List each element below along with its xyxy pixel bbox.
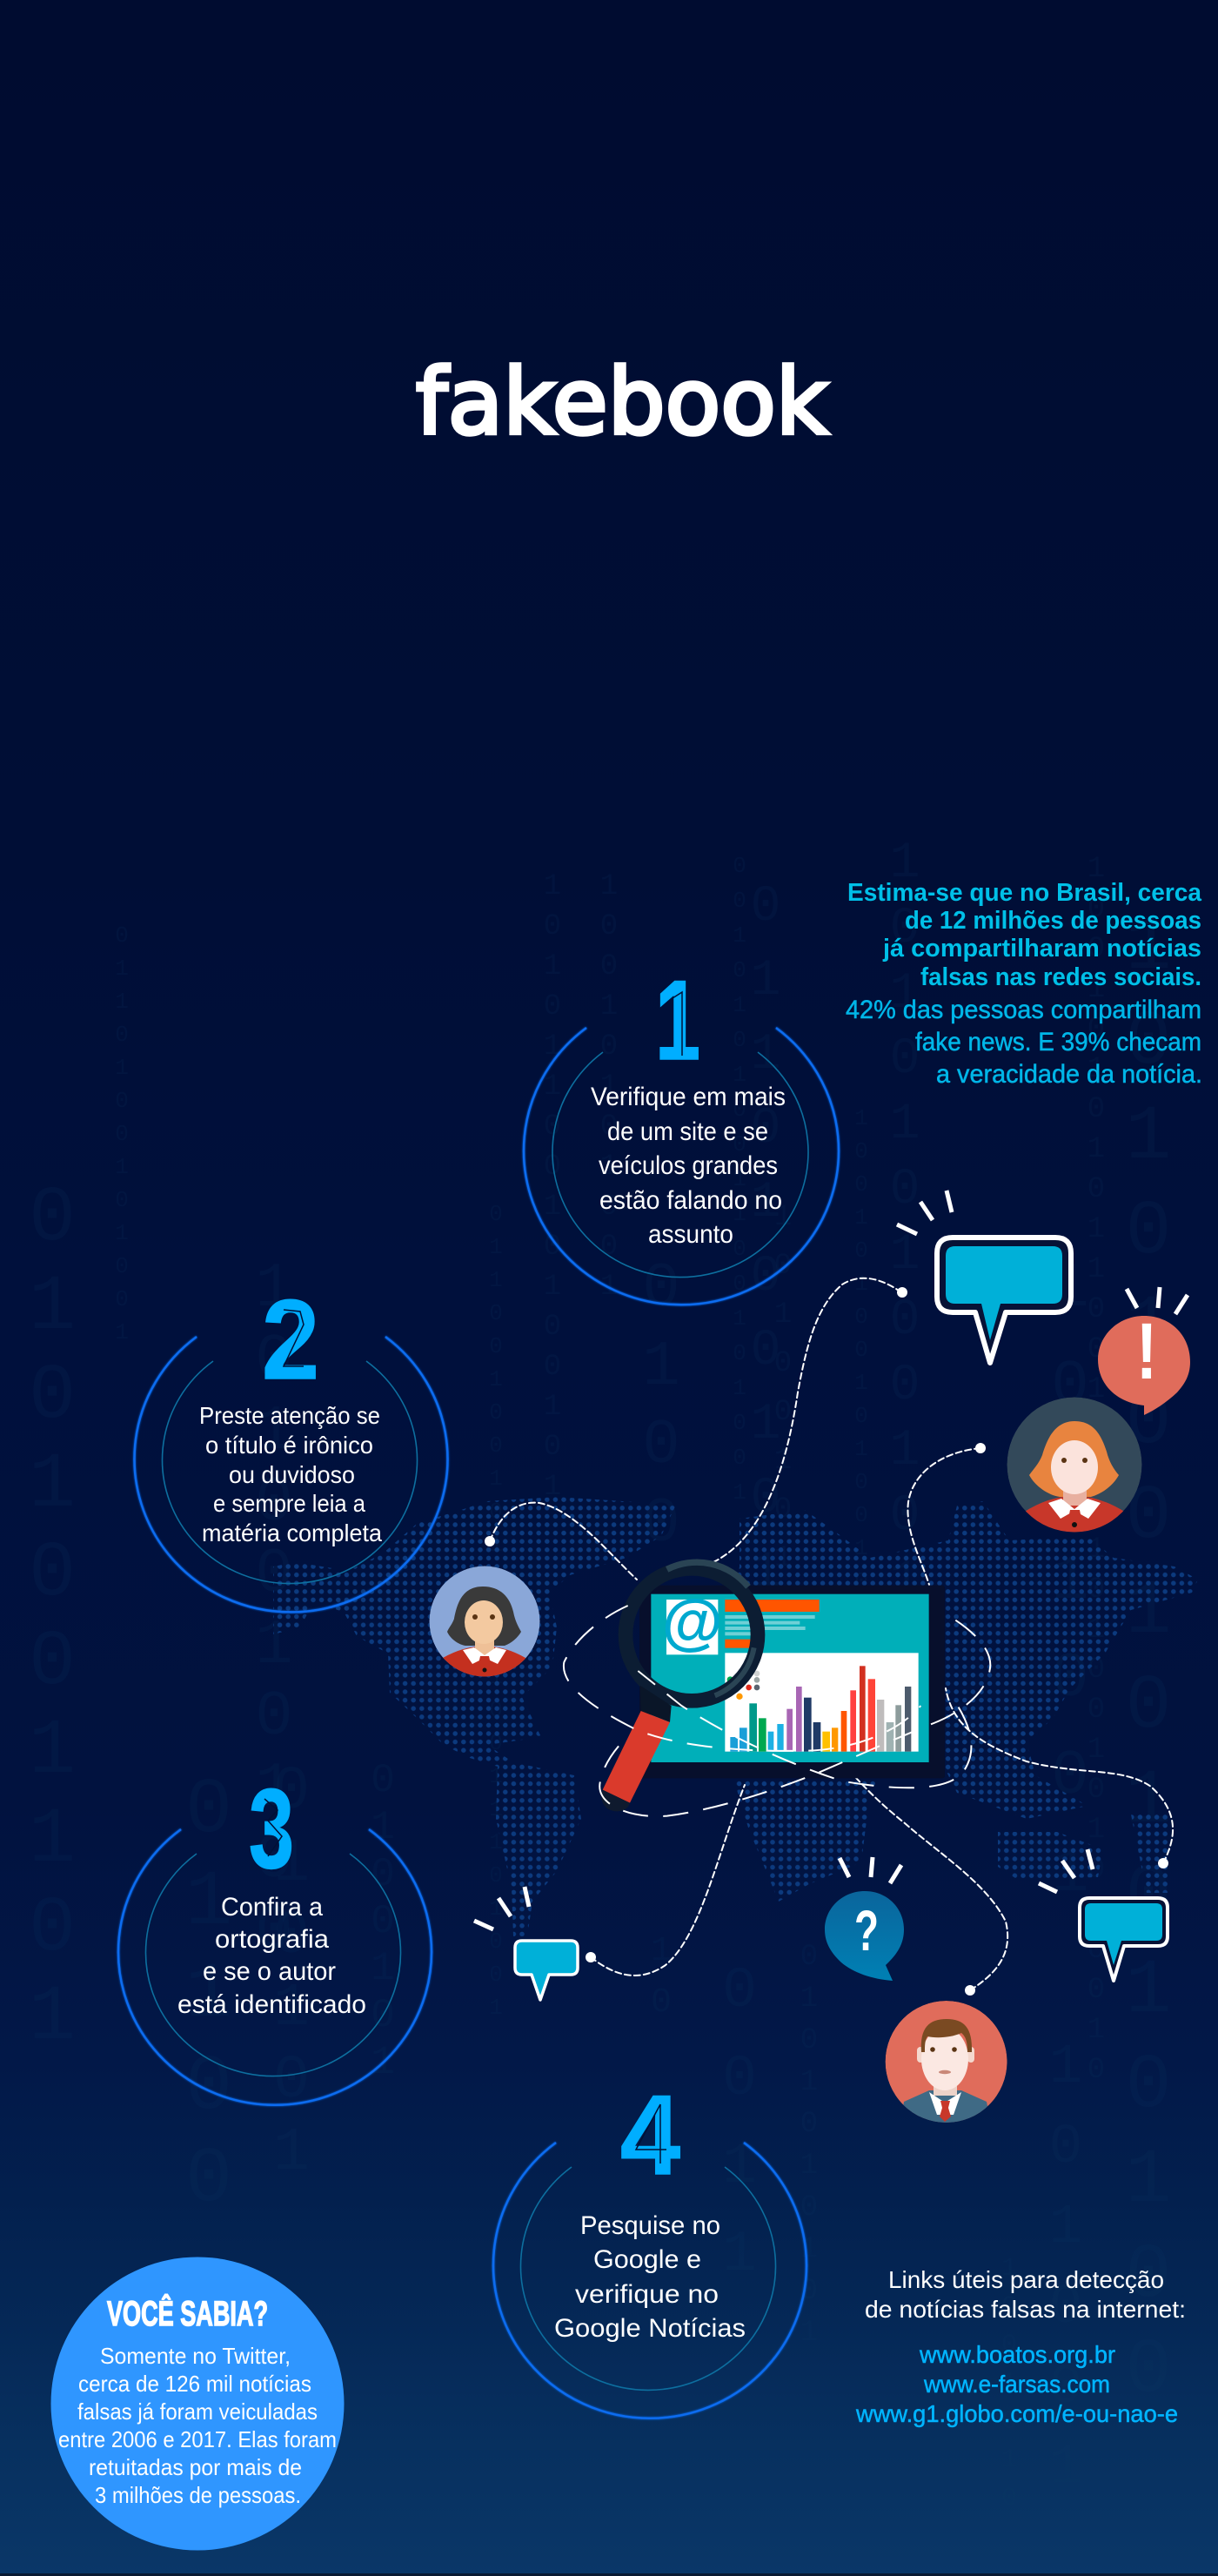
speech bubble: large [897,1191,1071,1363]
binary digit columns: 0100101 [360,1758,405,2087]
binary digit columns: 10 [642,1932,680,2035]
binary digit columns: 0010101001100101001 [726,853,753,1514]
tablet body [639,1586,945,1778]
links heading: Links úteis para detecção [888,2266,1164,2293]
question ticks [840,1857,901,1883]
step 1 text: assunto [648,1220,733,1249]
did you know text: 3 milhões de pessoas. [95,2482,301,2508]
binary digit columns: 010101 [258,1758,325,2191]
dotted world map [273,1497,1198,1936]
step 3 [118,1765,432,2105]
step 1 [524,956,839,1305]
binary digit columns: 1010110010100101 [536,870,569,1511]
bubble attention ticks [897,1191,952,1234]
did you know heading: VOCÊ SABIA? [107,2293,268,2333]
step 2 number: 2 [262,1276,319,1403]
did you know text: Somente no Twitter, [100,2343,291,2369]
step 3 text: Confira a [221,1893,323,1922]
step 4 [493,2071,806,2418]
did you know text: falsas já foram veiculadas [77,2398,318,2425]
step 1 number: 1 [655,956,700,1083]
alert bubble [1098,1287,1190,1415]
statistics text [846,879,1202,1089]
did you know text: cerca de 126 mil notícias [78,2371,311,2397]
binary digit columns: 1001010101100101010100101010010 [1080,853,1113,2094]
links list: www.g1.globo.com/e-ou-nao-e [855,2400,1178,2427]
links list [855,2341,1178,2427]
step 2 text: ou duvidoso [229,1461,355,1488]
step 3 number: 3 [249,1765,294,1892]
binary digit columns: 1010010100 [238,1253,310,1967]
step 2 text: e sempre leia a [213,1490,365,1517]
did you know text: retuitadas por mais de [89,2454,302,2480]
ticks [474,1887,529,1929]
alert mark: ! [1136,1307,1157,1396]
alert ticks [1127,1287,1188,1314]
links heading [865,2266,1186,2323]
binary digit columns: 10010100101001010010 [848,1105,874,1767]
binary digit columns: 0110100101001 [109,922,135,1352]
useful links [855,2266,1186,2427]
links list: www.e-farsas.com [923,2371,1110,2398]
title: fakebook [416,349,828,455]
binary digit columns: 1010100101010100 [1105,905,1192,2423]
magnifier handle [601,1686,672,1811]
binary digit columns: 0101010101 [793,1941,826,2358]
statistics text: Estima-se que no Brasil, cerca [847,879,1202,907]
statistics text: de 12 milhões de pessoas [905,907,1201,935]
binary digit columns: 10010101001 [592,870,626,1311]
dashed orbit around tablet [564,1606,990,1816]
step 3 text: ortografia [215,1925,329,1954]
statistics text: 42% das pessoas compartilham [846,996,1201,1024]
tablet with magnifying glass [564,1562,990,1816]
binary digit columns [8,835,1192,2522]
avatar: man [886,2001,1007,2128]
avatar: woman with dark hair [430,1566,539,1680]
ticks [1039,1849,1093,1892]
north america [273,1497,676,1936]
binary digit columns: 0100 [626,1253,697,1566]
question shape [825,1891,904,1981]
statistics text: a veracidade da notícia. [936,1060,1202,1089]
bubble shape [515,1941,578,2000]
dashed connector lines [490,1278,1173,1990]
step 4 text: verifique no [575,2280,719,2309]
statistics text: falsas nas redes sociais. [920,963,1201,991]
binary digit columns: 0110010010101010011101001 [483,1201,509,2028]
step 1 text: de um site e se [607,1117,768,1146]
step 2 text: matéria completa [202,1519,382,1546]
bubble shape [1080,1898,1168,1981]
step 2 rings [135,1337,448,1612]
eurasia and africa [735,1501,1198,1902]
connector end dots [485,1287,1168,1996]
statistics text: já compartilharam notícias [882,935,1201,963]
step 2 text: Preste atenção se [199,1402,380,1429]
step 1 text: veículos grandes [599,1151,778,1180]
binary digit columns: 101001010 [766,1201,800,1640]
did you know text: entre 2006 e 2017. Elas foram [58,2426,337,2452]
binary digit columns: 1010101001010 [877,835,933,1684]
binary digit columns: 01100 [164,1767,253,2228]
step 3 text [177,1893,366,2019]
step 1 rings [524,1028,839,1305]
step 4 text [554,2211,746,2343]
speech bubble: right [1039,1849,1168,1981]
step 3 text: e se o autor [203,1957,336,1986]
statistics text: fake news. E 39% checam [915,1028,1201,1057]
avatar: woman with orange hair [1007,1398,1141,1540]
step 4 rings [493,2143,806,2418]
step 2 text: o título é irônico [205,1432,373,1459]
bar chart [725,1653,919,1752]
panel: did you know [50,2257,345,2550]
question mark: ? [854,1898,879,1962]
alert shape [1098,1316,1190,1415]
tablet screen [651,1594,929,1762]
binary digit columns: 0011 [706,1958,773,2310]
step 4 text: Pesquise no [580,2211,720,2240]
binary digit columns: 101001 [1034,2036,1097,2517]
step 3 text: está identificado [177,1990,366,2019]
binary digit columns: 01101001010 [738,879,793,1693]
headline bars [725,1600,820,1648]
binary digit columns: 1011001 [1034,1253,1106,1935]
did you know text [58,2343,337,2508]
step 4 text: Google e [593,2245,701,2274]
step 4 text: Google Notícias [554,2314,746,2343]
step 2 [135,1276,448,1612]
step 1 text: estão falando no [599,1186,782,1215]
bubble shape [937,1238,1071,1363]
magnifier lens [626,1562,758,1701]
australia [998,1815,1170,1893]
at-sign tile: @ [662,1587,723,1656]
step 1 text [591,1083,786,1249]
did you know circle [50,2257,345,2550]
question bubble [825,1857,904,1981]
binary digit columns: 1001010 [994,2254,1024,2522]
links list: www.boatos.org.br [919,2341,1115,2368]
links heading: de notícias falsas na internet: [865,2296,1186,2323]
binary digit columns: 0101001101 [8,1175,97,2063]
step 4 number: 4 [620,2071,680,2198]
step 2 text [199,1402,382,1546]
speech bubble: small left [474,1887,578,2000]
bottom edge [0,2573,1218,2576]
step 3 rings [118,1829,432,2105]
step 1 text: Verifique em mais [591,1083,786,1111]
